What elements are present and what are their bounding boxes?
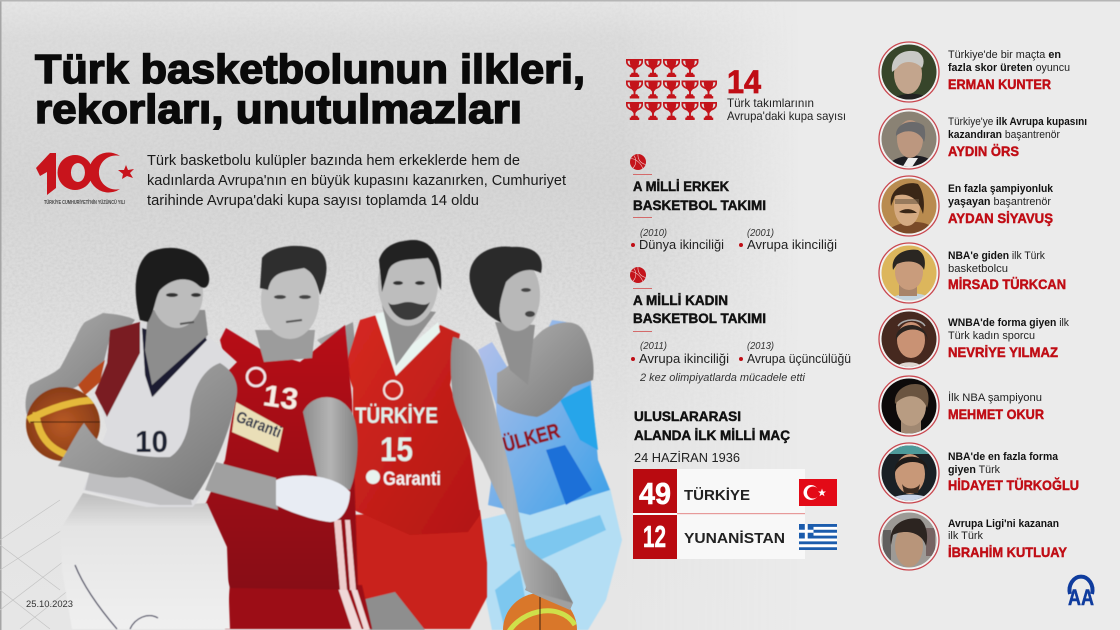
panel: men's national team: BASKETBOL TAKIMI [633,198,766,213]
score table [633,469,837,559]
panel: women's national team: (2013) [747,341,774,352]
panel: men's national team: Avrupa ikinciliği [747,238,837,252]
logo: Anadolu Agency: AA [1068,585,1094,610]
panel: men's national team: (2010) [640,228,667,239]
text: Aydan Siyavuş: En fazla şampiyonluk [948,183,1054,195]
panel: men's national team: (2001) [747,228,774,239]
text: Aydın Örs: kazandıran başantrenör [948,129,1060,141]
text: Erman Kunter [948,49,1070,92]
panel: men's national team: Dünya ikinciliği [639,238,724,252]
player 3: Türkiye 15: 15 [380,431,413,469]
cup count: Avrupa'daki kupa sayısı [727,109,846,123]
text: Mehmet Okur: MEHMET OKUR [948,406,1044,422]
intro text: tarihinde Avrupa'daki kupa sayısı toplamda 14 oldu [147,193,479,209]
icon: basketball [630,267,646,283]
panel: women's national team: BASKETBOL TAKIMI [633,311,766,326]
player 2: red 13 [205,246,372,630]
text: Mirsad Türkcan: MİRSAD TÜRKCAN [948,276,1066,292]
text: İbrahim Kutluay: Avrupa Ligi'ni kazanan [948,518,1059,530]
cup count [727,64,846,123]
player 3: Türkiye 15 [317,240,573,630]
icon: Turkish flag [799,479,837,506]
intro text: Türk basketbolu kulüpler bazında hem erkeklerde hem de [147,153,520,169]
player 2: red 13: 13 [261,379,300,417]
text: Aydın Örs: AYDIN ÖRS [948,143,1019,159]
heading: first international match: ULUSLARARASI [634,409,741,424]
text: Hidayet Türkoğlu: HİDAYET TÜRKOĞLU [948,476,1079,493]
title: rekorları, unutulmazları [35,86,522,132]
logo: Anadolu Agency [1068,577,1094,610]
portrait: Hidayet Türkoğlu [879,443,939,503]
cup count: 14 [727,64,761,100]
title: Türk basketbolunun ilkleri, [35,46,585,92]
panel: women's national team: 2 kez olimpiyatlarda mücadele etti [639,372,806,384]
text: Aydın Örs: Türkiye'ye ilk Avrupa kupasını [948,116,1087,128]
text: Aydan Siyavuş [948,183,1054,226]
score: Türkiye 49: TÜRKİYE [684,487,750,504]
text: Aydan Siyavuş: AYDAN SİYAVUŞ [948,210,1053,226]
text: Hidayet Türkoğlu: NBA'de en fazla forma [948,451,1059,463]
logo: 100th anniversary: TÜRKİYE CUMHURİYETİ'NİN YÜZÜNCÜ YILI [44,199,125,206]
logo: 100th anniversary [36,152,134,206]
text: Aydın Örs [948,116,1087,159]
intro text: kadınlarda Avrupa'nın en büyük kupasını kazanırken, Cumhuriyet [147,173,566,189]
text: Mirsad Türkcan: basketbolcu [948,263,1008,275]
score: Türkiye 49: 49 [639,476,671,511]
text: Nevriye Yılmaz: WNBA'de forma giyen ilk [948,317,1069,329]
panel: women's national team: A MİLLİ KADIN [633,293,728,308]
panel: men's national team [630,154,837,252]
portrait: İbrahim Kutluay [879,510,939,570]
icon: basketball [630,154,646,170]
text: Hidayet Türkoğlu: giyen Türk [948,464,1000,476]
player 4: blue jersey: ÜLKER [500,420,562,457]
icon: Greek flag [799,524,837,550]
portrait: Nevriye Yılmaz [879,309,939,369]
score: Türkiye 49 [633,469,750,513]
text: Hidayet Türkoğlu [948,451,1079,493]
title [35,46,585,132]
panel: women's national team: (2011) [640,341,667,352]
text: Aydan Siyavuş: yaşayan başantrenör [948,196,1051,208]
heading: first international match: 24 HAZİRAN 1936 [634,451,740,465]
text: Nevriye Yılmaz: NEVRİYE YILMAZ [948,344,1058,360]
trophies: 14 cups [626,59,717,120]
text: Mehmet Okur: İlk NBA şampiyonu [948,391,1042,404]
text: Erman Kunter: ERMAN KUNTER [948,76,1051,92]
heading: first international match [634,409,790,465]
player 1: white 10 [26,248,237,629]
basketball: orange and lime [503,572,577,630]
portrait: Mirsad Türkcan [879,243,939,303]
panel: women's national team: Avrupa üçüncülüğü [747,352,851,366]
text: İbrahim Kutluay: ilk Türk [948,530,983,542]
text: İbrahim Kutluay [948,518,1068,560]
score: Yunanistan 12 [633,515,785,559]
panel: men's national team: A MİLLİ ERKEK [633,179,729,194]
portrait: Erman Kunter [879,42,939,102]
text: Mehmet Okur [948,391,1044,422]
score: Yunanistan 12: YUNANİSTAN [684,530,785,547]
text: Erman Kunter: fazla skor üreten oyuncu [948,62,1070,74]
text: Nevriye Yılmaz: Türk kadın sporcu [948,330,1035,342]
heading: first international match: ALANDA İLK MİLLİ MAÇ [634,428,790,443]
player 2: red 13: Garanti [234,409,284,442]
panel: women's national team [630,267,851,384]
portrait: Aydın Örs [879,109,939,170]
player 3: Türkiye 15: TÜRKİYE [355,403,438,428]
text: İbrahim Kutluay: İBRAHİM KUTLUAY [948,544,1068,560]
text: Mirsad Türkcan: NBA'e giden ilk Türk [948,250,1045,262]
panel: women's national team: Avrupa ikinciliği [639,352,729,366]
date: 25.10.2023 [26,599,73,610]
text: Mirsad Türkcan [948,250,1066,292]
player 4: blue jersey [470,247,622,630]
portrait: Mehmet Okur [879,376,939,436]
text: Nevriye Yılmaz [948,317,1069,360]
portrait: Aydan Siyavuş [879,176,939,236]
cup count: Türk takımlarının [727,96,814,110]
intro text [147,153,566,209]
player 1: white 10: 10 [135,424,168,459]
player 3: Türkiye 15: Garanti [383,469,441,490]
text: Erman Kunter: Türkiye'de bir maçta en [948,49,1061,61]
score: Yunanistan 12: 12 [643,519,666,554]
